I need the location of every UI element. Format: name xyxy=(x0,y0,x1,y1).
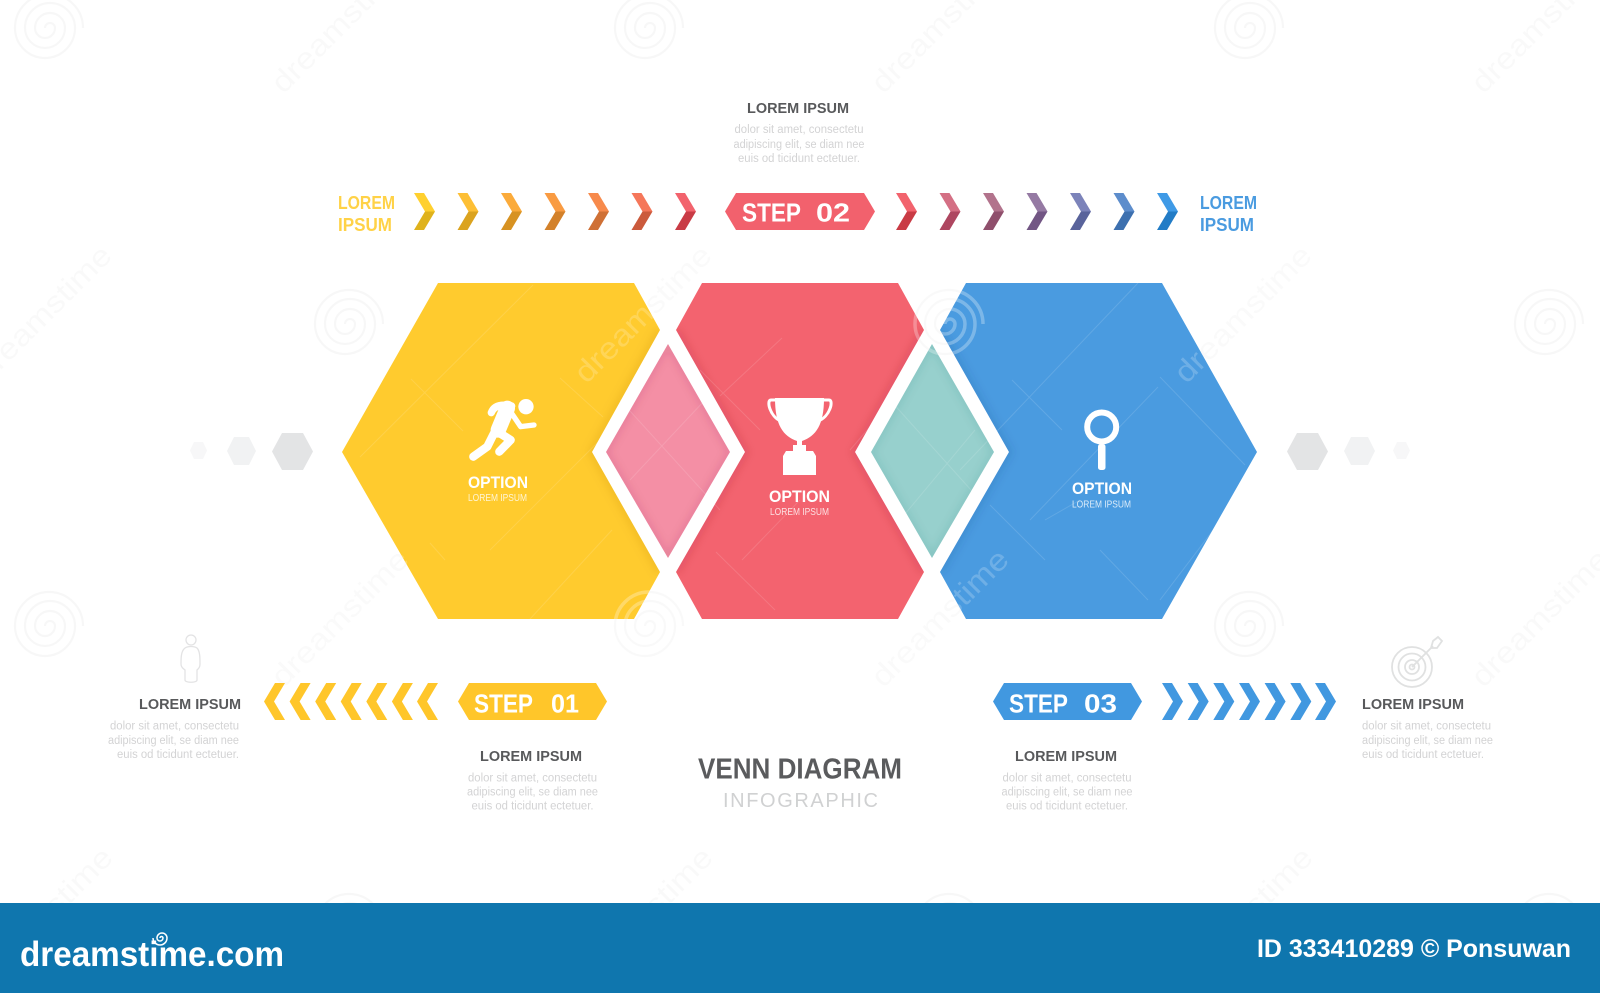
panel: red hexagon option xyxy=(676,283,924,619)
watermark: grey layer on white background: dreamstime xyxy=(569,841,720,992)
title: venn diagram xyxy=(698,754,902,812)
watermark: grey layer on white background: dreamstime xyxy=(265,543,416,694)
label: yellow lorem ipsum: LOREM xyxy=(338,193,395,213)
arrows: step 01 yellow chevrons pointing left xyxy=(264,683,438,720)
label: option yellow xyxy=(468,473,528,504)
text block: step 01 description: adipiscing elit, se diam nee xyxy=(467,786,598,798)
title: venn diagram: VENN DIAGRAM xyxy=(698,754,902,786)
badge: step 03: 03 xyxy=(1084,688,1117,718)
label: option red: OPTION xyxy=(769,487,830,506)
text block: step 03 description: LOREM IPSUM xyxy=(1015,749,1117,765)
text block: right description xyxy=(1362,697,1493,761)
panel: blue hexagon option xyxy=(940,283,1257,619)
watermark: grey layer on white background: dreamstime xyxy=(1169,841,1320,992)
watermark: white layer over shapes: dreamstime xyxy=(568,239,719,390)
badge: step 02 xyxy=(725,193,875,230)
text block: left description: dolor sit amet, consectetu xyxy=(110,720,239,732)
watermark: white layer over shapes: dreamstime xyxy=(1168,239,1319,390)
watermark: grey layer on white background: dreamstime xyxy=(1168,239,1319,390)
badge: step 01: STEP xyxy=(474,688,533,718)
decorative: right small grey hexagons xyxy=(1287,433,1410,470)
text block: step 03 description: adipiscing elit, se diam nee xyxy=(1002,786,1132,798)
icon: runner xyxy=(473,399,534,457)
label: option blue: LOREM IPSUM xyxy=(1072,498,1131,510)
text block: step 02 description: LOREM IPSUM xyxy=(747,101,849,117)
text block: left description: euis od ticidunt ectetuer. xyxy=(117,749,239,761)
label: option yellow: OPTION xyxy=(468,473,528,492)
panel: teal diamond overlap xyxy=(871,344,994,558)
watermark: grey layer on white background: dreamstime xyxy=(568,239,719,390)
text block: step 03 description: euis od ticidunt ectetuer. xyxy=(1006,800,1128,812)
badge: step 02: 02 xyxy=(816,198,850,228)
badge: step 01: 01 xyxy=(551,688,579,718)
label: blue lorem ipsum: IPSUM xyxy=(1200,215,1254,235)
footer band xyxy=(0,903,1600,993)
text block: step 02 description xyxy=(734,101,864,165)
panel: pink diamond overlap xyxy=(606,344,730,558)
icon: target with arrow xyxy=(1392,637,1442,687)
decorative: left small grey hexagons xyxy=(190,433,313,470)
text block: right description: dolor sit amet, consectetu xyxy=(1362,720,1491,732)
text block: right description: euis od ticidunt ectetuer. xyxy=(1362,749,1484,761)
text block: left description xyxy=(108,697,241,761)
label: blue lorem ipsum xyxy=(1200,193,1257,235)
text block: step 03 description: dolor sit amet, consectetu xyxy=(1002,772,1132,784)
label: blue lorem ipsum: LOREM xyxy=(1200,193,1257,213)
label: option blue xyxy=(1072,479,1132,510)
text block: step 02 description: euis od ticidunt ectetuer. xyxy=(738,153,860,165)
watermark: grey layer on white background: dreamstime xyxy=(1465,543,1600,694)
text block: step 01 description: euis od ticidunt ectetuer. xyxy=(472,800,594,812)
watermark: white layer over shapes: dreamstime xyxy=(865,543,1016,694)
arrows: top left chevrons yellow to red xyxy=(414,193,696,230)
text block: step 02 description: adipiscing elit, se diam nee xyxy=(734,139,864,151)
text block: left description: adipiscing elit, se diam nee xyxy=(108,735,239,747)
icon: person outline xyxy=(181,635,200,682)
text block: step 03 description xyxy=(1002,749,1132,812)
badge: step 03: STEP xyxy=(1009,688,1068,718)
footer logo: dreamstime.com: dreamstime.com xyxy=(20,935,284,974)
label: yellow lorem ipsum: IPSUM xyxy=(338,215,392,235)
arrows: top right chevrons red to blue xyxy=(896,193,1178,230)
badge: step 01 xyxy=(458,683,607,720)
text block: step 01 description: LOREM IPSUM xyxy=(480,749,582,765)
text block: step 02 description: dolor sit amet, consectetu xyxy=(734,124,864,136)
watermark: white layer over shapes: dreamstime xyxy=(265,543,416,694)
badge: step 02: STEP xyxy=(742,198,801,228)
label: yellow lorem ipsum xyxy=(338,193,395,235)
label: option yellow: LOREM IPSUM xyxy=(468,492,527,504)
footer credit: ID 333410289 © Ponsuwan xyxy=(1257,935,1571,963)
label: option red: LOREM IPSUM xyxy=(770,506,829,518)
icon: magnifier xyxy=(1087,412,1116,470)
text block: right description: LOREM IPSUM xyxy=(1362,697,1464,713)
title: venn diagram: INFOGRAPHIC xyxy=(723,790,878,812)
text block: right description: adipiscing elit, se diam nee xyxy=(1362,735,1493,747)
text block: step 01 description: dolor sit amet, consectetu xyxy=(468,772,597,784)
watermark: grey layer on white background: dreamstime xyxy=(865,543,1016,694)
label: option blue: OPTION xyxy=(1072,479,1132,498)
icon: trophy xyxy=(769,398,831,475)
label: option red xyxy=(769,487,830,518)
badge: step 03 xyxy=(993,683,1142,720)
panel: yellow hexagon option xyxy=(342,283,660,619)
arrows: step 03 blue chevrons pointing right xyxy=(1162,683,1336,720)
text block: step 01 description xyxy=(467,749,598,812)
watermark: white layer over shapes xyxy=(265,239,1319,694)
text block: left description: LOREM IPSUM xyxy=(139,697,241,713)
